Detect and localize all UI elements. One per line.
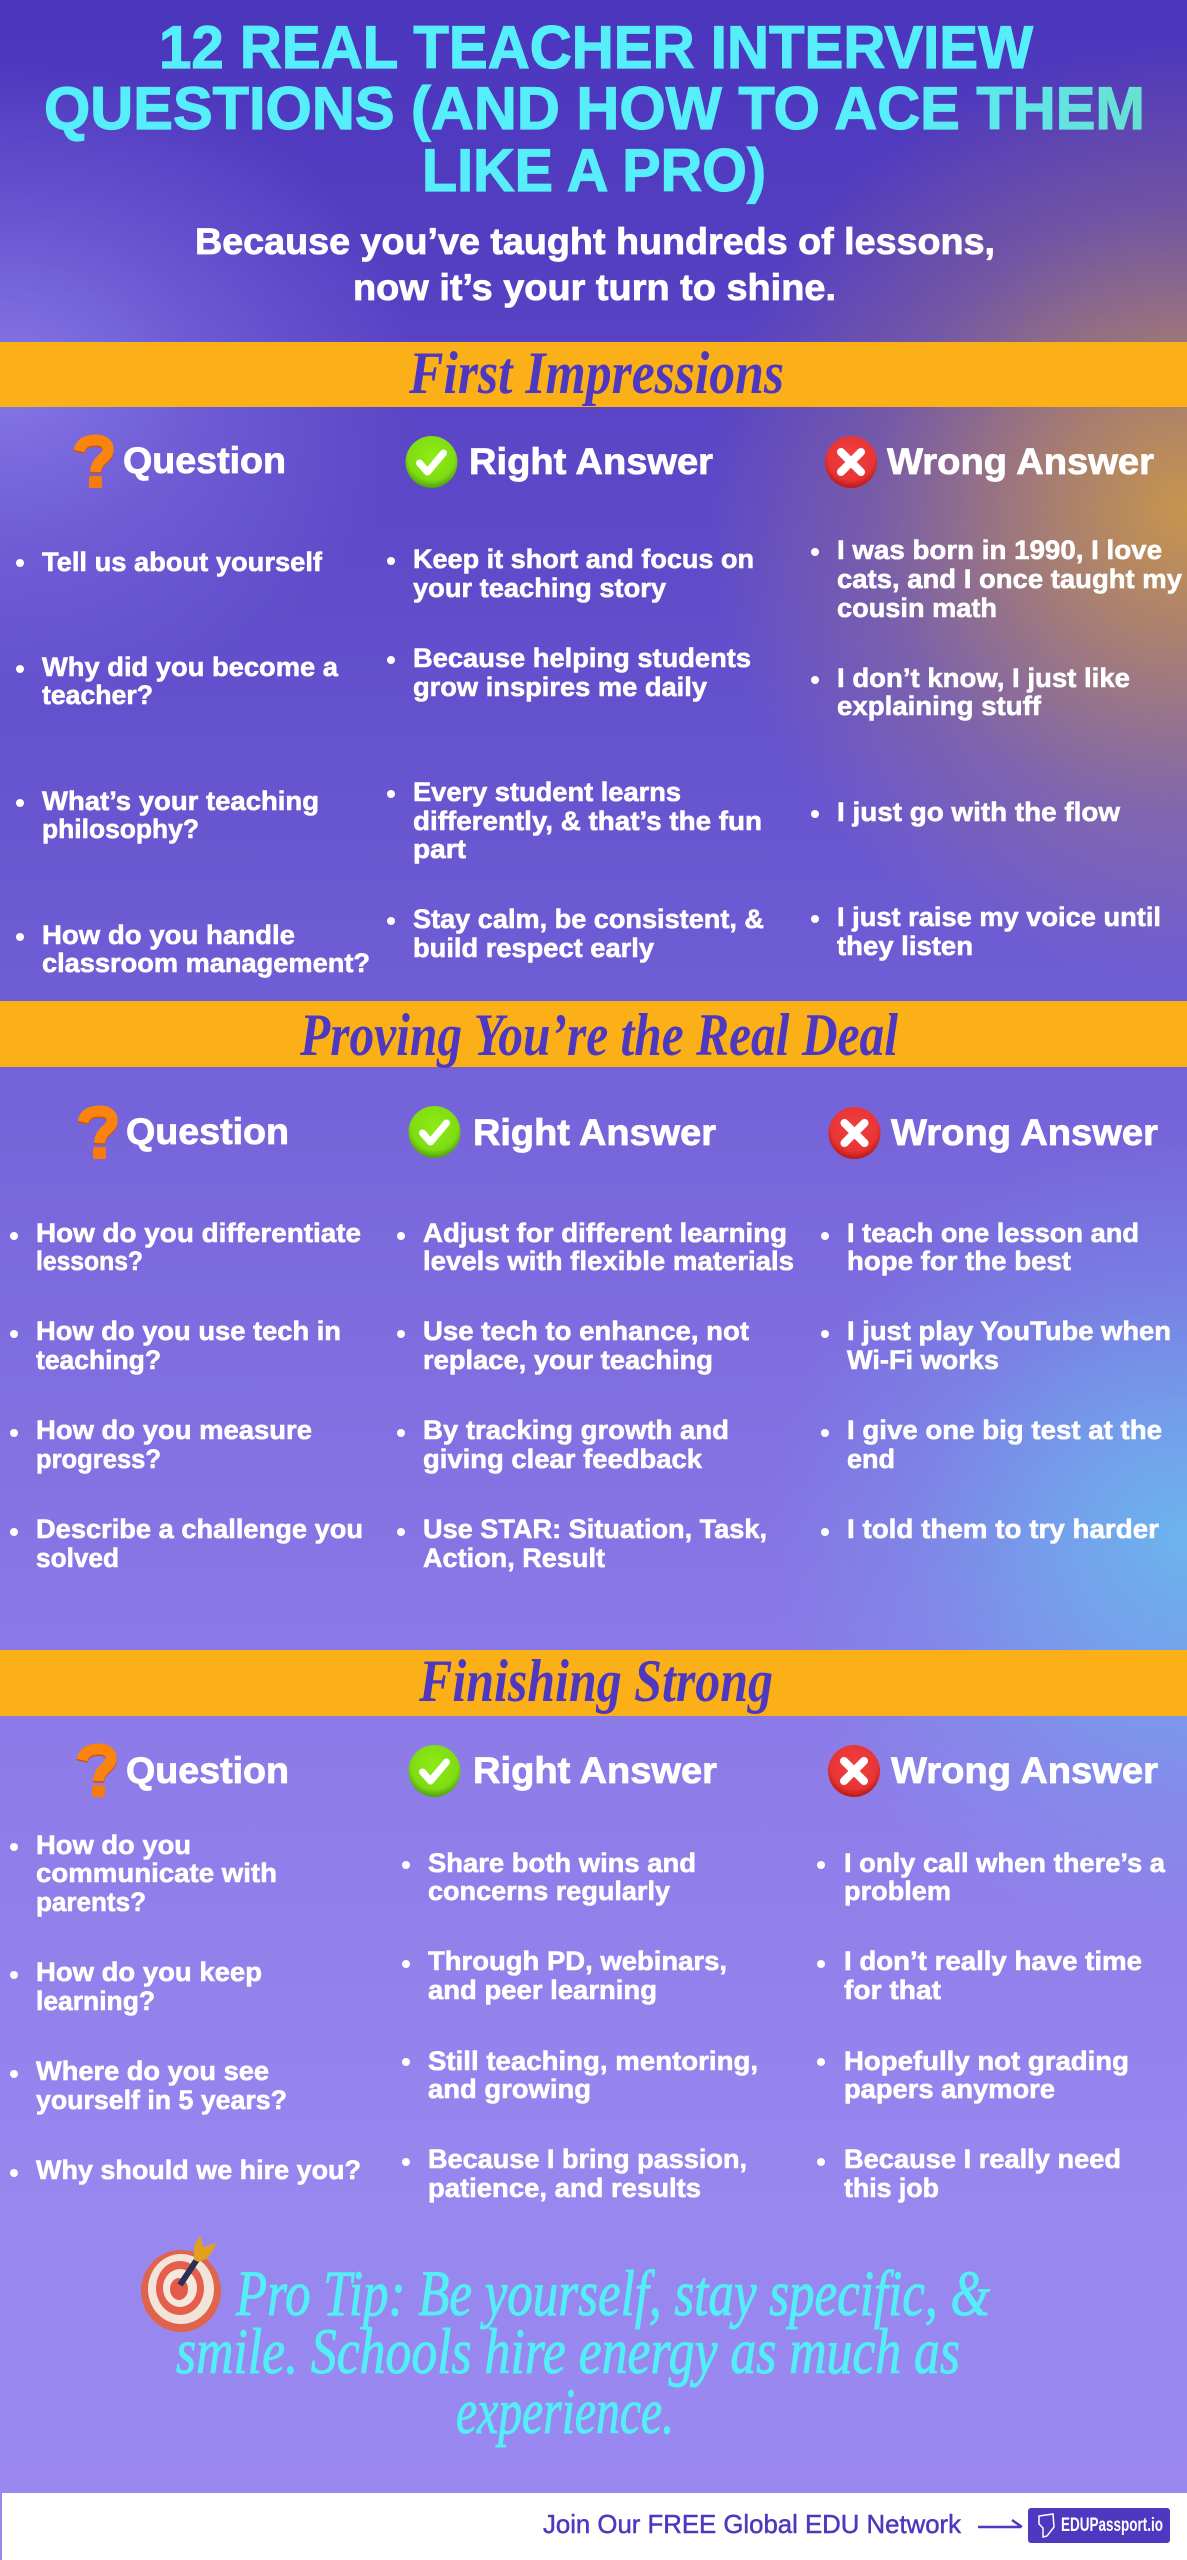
- list: wrong answers: this job: [844, 2173, 939, 2203]
- list: wrong answers: I teach one lesson and: [847, 1218, 1139, 1248]
- list: questions: Describe a challenge you: [36, 1514, 363, 1544]
- list: questions: Why did you become a: [42, 652, 339, 682]
- list: wrong answers: cousin math: [837, 593, 997, 623]
- list: questions: [10, 1830, 361, 2185]
- list: wrong answers: end: [847, 1444, 895, 1474]
- list: wrong answers: I only call when there’s a: [844, 1848, 1166, 1878]
- footer bar: [2, 2493, 1187, 2560]
- list: right answers: differently, & that’s the fun: [413, 806, 762, 836]
- list: questions: classroom management?: [42, 948, 370, 978]
- list: right answers: [397, 1218, 794, 1573]
- section banner: Finishing Strong: [0, 1648, 1187, 1716]
- list: questions: lessons?: [36, 1246, 143, 1276]
- column header: Question: [82, 1749, 289, 1797]
- list: right answers: your teaching story: [413, 573, 666, 603]
- list: right answers: By tracking growth and: [423, 1415, 729, 1445]
- list: right answers: and peer learning: [428, 1975, 657, 2005]
- icon: red cross: [828, 1745, 880, 1797]
- list: wrong answers: Wi-Fi works: [847, 1345, 999, 1375]
- footer call to action: Join Our FREE Global EDU Network: [543, 2509, 962, 2539]
- column header: Right Answer: Right Answer: [473, 1112, 716, 1153]
- icon: green check: [408, 1106, 460, 1158]
- title: 12 REAL TEACHER INTERVIEW: [159, 14, 1033, 81]
- list: questions: teacher?: [42, 680, 153, 710]
- list: wrong answers: papers anymore: [844, 2074, 1055, 2104]
- arrow: [978, 2520, 1022, 2527]
- list: questions: learning?: [36, 1986, 155, 2016]
- subtitle: Because you’ve taught hundreds of lessons,: [195, 221, 995, 262]
- icon: question mark: [82, 1749, 111, 1797]
- list: questions: parents?: [36, 1887, 146, 1917]
- section banner: First Impressions: [0, 340, 1187, 407]
- subtitle: [195, 221, 995, 308]
- icon: question mark: [79, 440, 108, 488]
- column header: Question: [79, 440, 286, 488]
- section banner: Finishing Strong: Finishing Strong: [418, 1648, 773, 1714]
- list: wrong answers: hope for the best: [847, 1246, 1071, 1276]
- column header: Right Answer: [406, 436, 713, 488]
- list: wrong answers: I just go with the flow: [837, 797, 1121, 827]
- column header: Wrong Answer: [828, 1745, 1158, 1797]
- list: right answers: Stay calm, be consistent, &: [413, 904, 764, 934]
- title: [44, 14, 1145, 204]
- list: right answers: giving clear feedback: [423, 1444, 703, 1474]
- column header: Wrong Answer: Wrong Answer: [891, 1750, 1158, 1791]
- icon: green check: [406, 436, 458, 488]
- list: right answers: grow inspires me daily: [413, 672, 707, 702]
- list: right answers: and growing: [428, 2074, 591, 2104]
- list: questions: How do you use tech in: [36, 1316, 341, 1346]
- icon: question mark: [83, 1111, 112, 1159]
- list: right answers: Because I bring passion,: [428, 2144, 747, 2174]
- list: wrong answers: Because I really need: [844, 2144, 1121, 2174]
- pro tip text: Pro Tip: Be yourself, stay specific, &: [235, 2258, 990, 2330]
- list: wrong answers: [811, 535, 1182, 961]
- list: right answers: levels with flexible materials: [423, 1246, 794, 1276]
- list: questions: teaching?: [36, 1345, 161, 1375]
- list: wrong answers: I was born in 1990, I love: [837, 535, 1162, 565]
- list: questions: Where do you see: [36, 2056, 269, 2086]
- list: right answers: Adjust for different learning: [423, 1218, 787, 1248]
- title: QUESTIONS (AND HOW TO ACE THEM: [44, 75, 1145, 142]
- subtitle: now it’s your turn to shine.: [353, 267, 836, 308]
- list: wrong answers: I don’t know, I just like: [837, 663, 1130, 693]
- list: wrong answers: I don’t really have time: [844, 1946, 1142, 1976]
- icon: red cross: [828, 1107, 880, 1159]
- column header: Right Answer: [408, 1106, 716, 1158]
- list: questions: yourself in 5 years?: [36, 2085, 287, 2115]
- column header: Question: Question: [126, 1750, 289, 1791]
- column header: Wrong Answer: Wrong Answer: [887, 441, 1154, 482]
- panel: Proving You're the Real Deal: [0, 1001, 1187, 1573]
- list: questions: solved: [36, 1543, 119, 1573]
- list: right answers: Through PD, webinars,: [428, 1946, 727, 1976]
- section banner: Proving You're the Real Deal: [0, 1001, 1187, 1068]
- list: questions: How do you keep: [36, 1957, 262, 1987]
- column header: Question: [83, 1111, 289, 1159]
- panel: Finishing Strong: [0, 1648, 1187, 2203]
- list: wrong answers: I told them to try harder: [847, 1514, 1160, 1544]
- list: wrong answers: they listen: [837, 931, 973, 961]
- list: questions: Why should we hire you?: [36, 2155, 361, 2185]
- column header: Right Answer: Right Answer: [469, 441, 713, 482]
- list: wrong answers: problem: [844, 1876, 951, 1906]
- list: wrong answers: I just raise my voice until: [837, 902, 1161, 932]
- icon: target with dart: [141, 2235, 221, 2332]
- list: right answers: Share both wins and: [428, 1848, 696, 1878]
- column header: Right Answer: [408, 1745, 717, 1797]
- list: right answers: Use STAR: Situation, Task,: [423, 1514, 767, 1544]
- section banner: Proving You're the Real Deal: Proving You’re the Real Deal: [299, 1002, 898, 1068]
- list: questions: [10, 1218, 363, 1573]
- list: right answers: concerns regularly: [428, 1876, 670, 1906]
- icon: red cross: [825, 436, 877, 488]
- list: questions: [16, 547, 370, 978]
- column header: Question: Question: [126, 1111, 289, 1152]
- list: wrong answers: [821, 1218, 1171, 1544]
- column header: Wrong Answer: [825, 436, 1154, 488]
- list: right answers: Keep it short and focus on: [413, 544, 754, 574]
- pro tip text: smile. Schools hire energy as much as: [176, 2316, 960, 2388]
- list: questions: How do you measure: [36, 1415, 312, 1445]
- list: right answers: part: [413, 834, 466, 864]
- list: right answers: Every student learns: [413, 777, 681, 807]
- column header: Question: Question: [123, 440, 286, 481]
- section banner: First Impressions: First Impressions: [408, 340, 784, 406]
- list: right answers: patience, and results: [428, 2173, 701, 2203]
- list: right answers: replace, your teaching: [423, 1345, 713, 1375]
- list: wrong answers: Hopefully not grading: [844, 2046, 1129, 2076]
- list: questions: How do you handle: [42, 920, 295, 950]
- list: wrong answers: I just play YouTube when: [847, 1316, 1171, 1346]
- column header: Right Answer: Right Answer: [473, 1750, 717, 1791]
- column header: Wrong Answer: Wrong Answer: [891, 1112, 1158, 1153]
- panel: First Impressions: [0, 340, 1187, 978]
- logo: EDUPassport.io: [1028, 2508, 1170, 2543]
- pro tip text: [176, 2258, 990, 2448]
- list: questions: What’s your teaching: [42, 786, 319, 816]
- list: right answers: build respect early: [413, 933, 654, 963]
- pro tip text: experience.: [456, 2376, 674, 2448]
- callout: pro tip: [141, 2235, 990, 2448]
- list: wrong answers: for that: [844, 1975, 941, 2005]
- list: wrong answers: explaining stuff: [837, 691, 1042, 721]
- list: questions: Tell us about yourself: [42, 547, 323, 577]
- list: right answers: Action, Result: [423, 1543, 605, 1573]
- list: questions: philosophy?: [42, 814, 199, 844]
- list: right answers: [402, 1848, 758, 2203]
- list: questions: progress?: [36, 1444, 161, 1474]
- title: LIKE A PRO): [422, 137, 766, 204]
- list: questions: How do you differentiate: [36, 1218, 361, 1248]
- list: right answers: Still teaching, mentoring,: [428, 2046, 758, 2076]
- list: right answers: [387, 544, 764, 963]
- list: wrong answers: I give one big test at the: [847, 1415, 1162, 1445]
- column header: Wrong Answer: [828, 1107, 1158, 1159]
- list: right answers: Because helping students: [413, 643, 751, 673]
- list: wrong answers: [817, 1848, 1166, 2203]
- list: questions: communicate with: [36, 1858, 277, 1888]
- list: questions: How do you: [36, 1830, 191, 1860]
- icon: green check: [408, 1745, 460, 1797]
- list: right answers: Use tech to enhance, not: [423, 1316, 749, 1346]
- list: wrong answers: cats, and I once taught my: [837, 564, 1182, 594]
